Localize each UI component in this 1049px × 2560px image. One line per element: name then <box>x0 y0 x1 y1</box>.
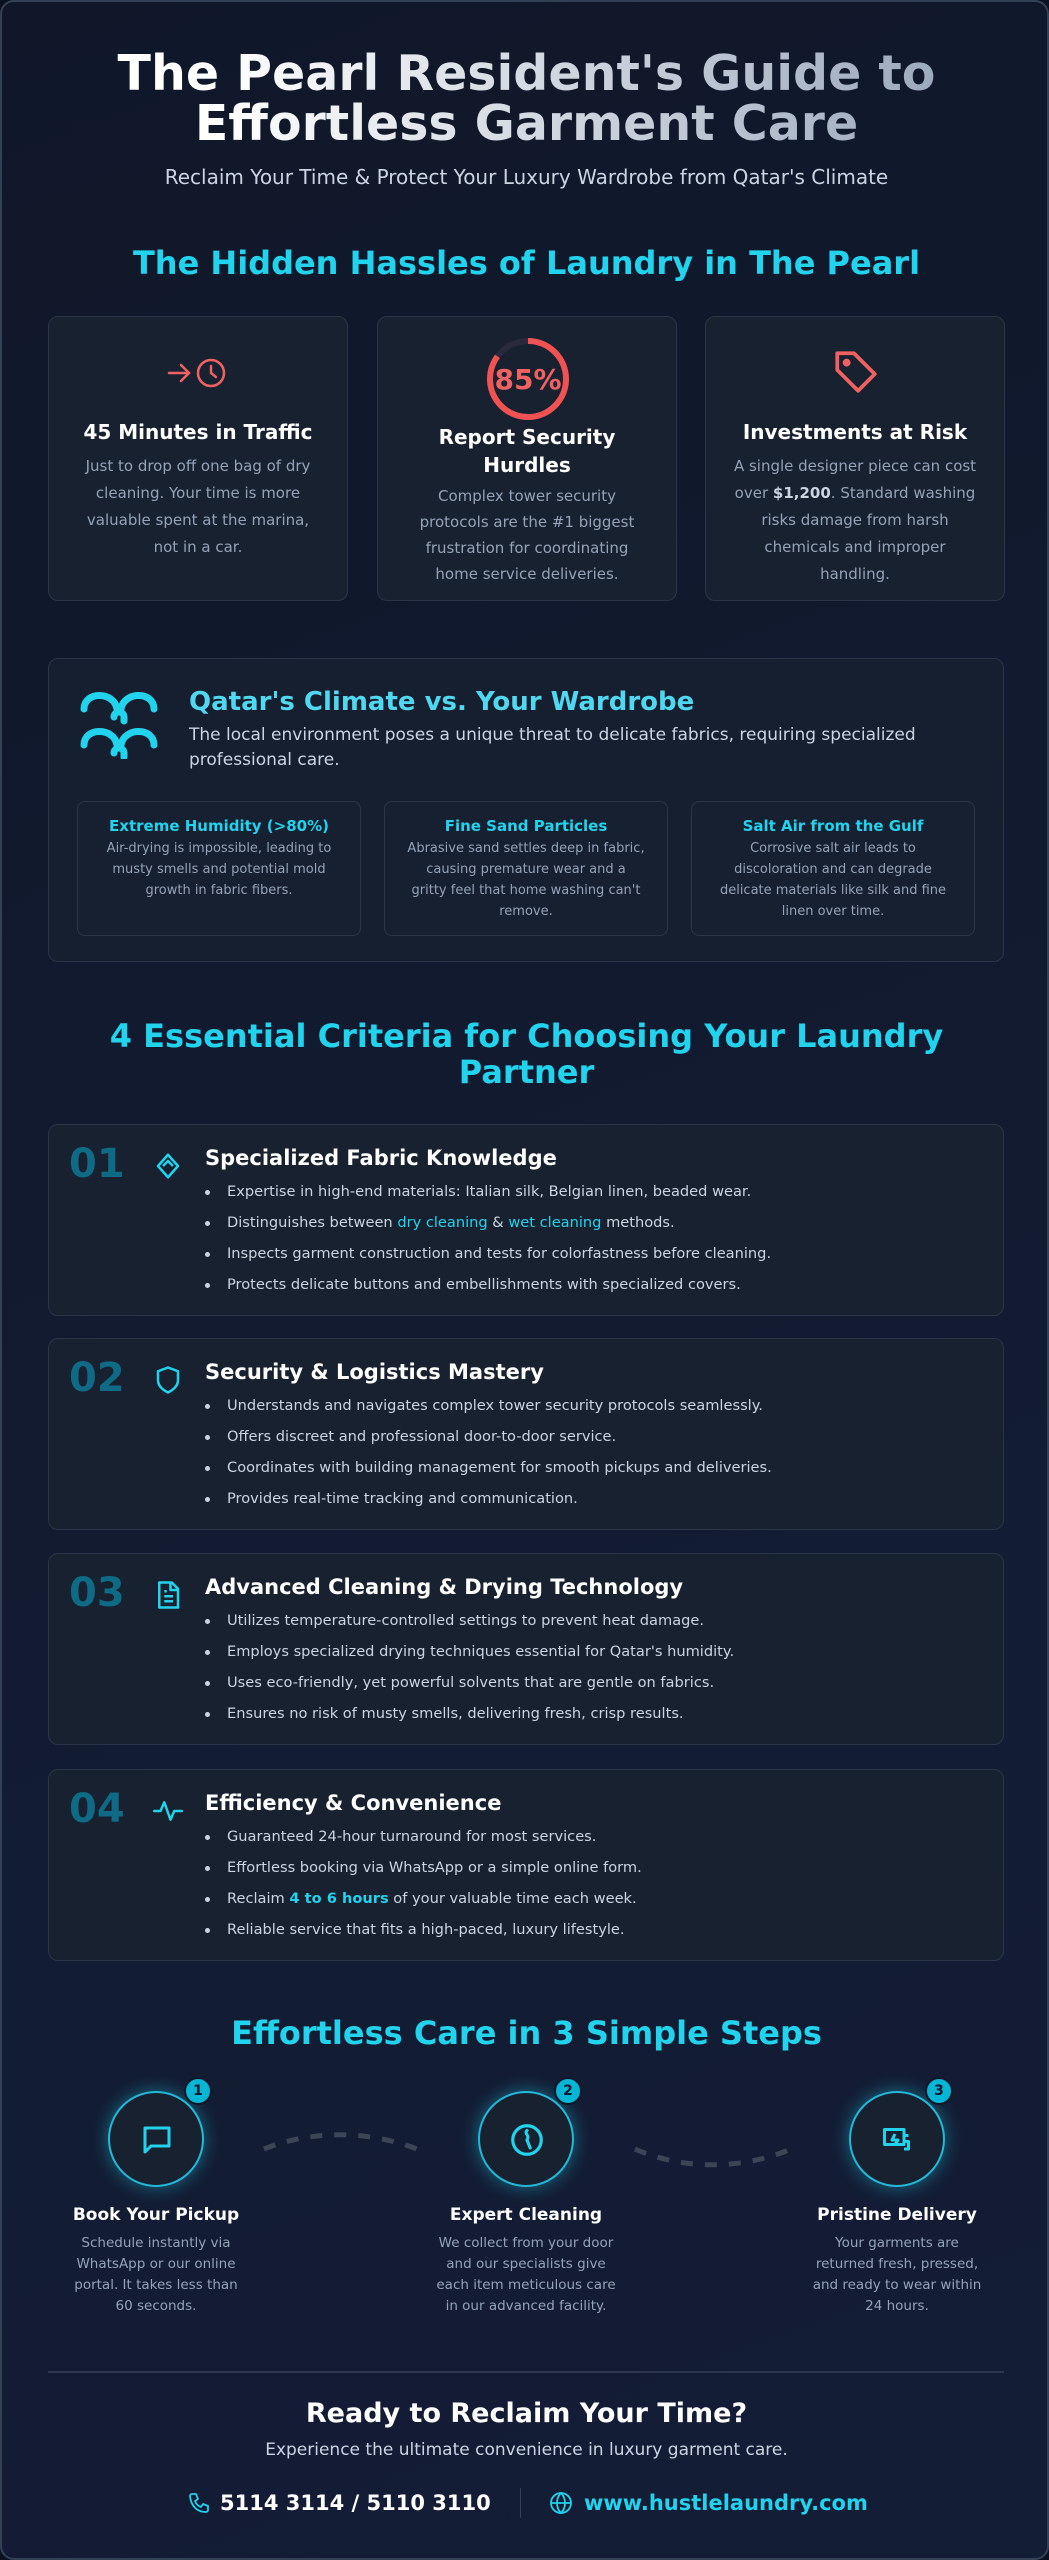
sub-card: sand: Fine Sand Particles <box>445 817 607 835</box>
cta text: Experience the ultimate convenience in luxury garment care. <box>265 2440 788 2460</box>
criteria 03: 03 <box>69 1570 125 1616</box>
criteria 03: Employs specialized drying techniques essential for Qatar's humidity. <box>227 1643 734 1660</box>
icon: shield <box>156 1366 180 1394</box>
card text: frustration for coordinating <box>426 539 628 557</box>
text: Schedule instantly via <box>81 2235 231 2251</box>
card title <box>439 425 615 477</box>
sub-card: humidity: Extreme Humidity (>80%) <box>109 817 329 835</box>
card title: 45 Minutes in Traffic <box>83 420 313 444</box>
criteria 04 <box>48 1769 1004 1961</box>
sub-card: salt: Corrosive salt air leads to discoloration and can degrade delicate materials like silk and fine linen over time. <box>720 841 946 919</box>
criteria 02: Understands and navigates complex tower security protocols seamlessly. <box>227 1397 763 1414</box>
icon: climate waves <box>80 692 158 759</box>
criteria 02: Provides real-time tracking and communication. <box>227 1490 578 1507</box>
title <box>2 49 1049 149</box>
card text: handling. <box>820 565 890 583</box>
icon: globe <box>550 2492 572 2514</box>
card text: valuable spent at the marina, <box>87 511 309 529</box>
card text <box>84 457 310 556</box>
text: and our specialists give <box>446 2256 606 2272</box>
climate text: The local environment poses a unique threat to delicate fabrics, requiring specialized professional care. <box>189 725 916 770</box>
criteria 02: Security & Logistics Mastery <box>205 1360 544 1384</box>
criteria 04: Reliable service that fits a high-paced, luxury lifestyle. <box>227 1921 625 1938</box>
text: 24 hours. <box>865 2298 929 2314</box>
icon: diamond <box>156 1153 180 1179</box>
step 1: 1 <box>193 2083 203 2099</box>
icon: pulse <box>153 1801 183 1821</box>
card text <box>734 457 976 583</box>
criteria 01: Protects delicate buttons and embellishments with specialized covers. <box>227 1276 741 1293</box>
panel: investments <box>705 316 1005 601</box>
criteria 04: Efficiency & Convenience <box>205 1791 501 1815</box>
contact row: www.hustlelaundry.com <box>584 2491 868 2515</box>
icon: cleaning <box>511 2124 543 2156</box>
card text: chemicals and improper <box>764 538 946 556</box>
criteria 03: Advanced Cleaning & Drying Technology <box>205 1575 683 1599</box>
card text: cleaning. Your time is more <box>96 484 300 502</box>
step 2: 2 <box>563 2083 573 2099</box>
text: portal. It takes less than <box>74 2277 238 2293</box>
climate heading: Qatar's Climate vs. Your Wardrobe <box>189 687 694 717</box>
criteria 04: Reclaim 4 to 6 hours of your valuable time each week. <box>227 1890 637 1907</box>
sub-card: humidity: Air-drying is impossible, leading to musty smells and potential mold growth in fabric fibers. <box>107 841 331 898</box>
criteria 01: Distinguishes between dry cleaning & wet cleaning methods. <box>227 1214 675 1231</box>
icon: 85% ring <box>487 338 569 420</box>
text: 60 seconds. <box>116 2298 196 2314</box>
criteria 03 <box>48 1553 1004 1745</box>
criteria 02 <box>48 1338 1004 1530</box>
criteria 02: Coordinates with building management for smooth pickups and deliveries. <box>227 1459 772 1476</box>
card text: home service deliveries. <box>435 565 619 583</box>
step 2 text: Expert Cleaning <box>450 2205 602 2225</box>
step 3: 3 <box>934 2083 944 2099</box>
card text: over $1,200. Standard washing <box>735 484 975 502</box>
criteria 04: 04 <box>69 1786 125 1832</box>
icon: arrow clock <box>168 358 226 388</box>
criteria 04: Effortless booking via WhatsApp or a simple online form. <box>227 1859 642 1876</box>
card text: not in a car. <box>154 538 242 556</box>
criteria 02: 02 <box>69 1355 125 1401</box>
criteria 01: Specialized Fabric Knowledge <box>205 1146 557 1170</box>
text: We collect from your door <box>439 2235 613 2251</box>
contact row <box>189 2488 868 2518</box>
text: in our advanced facility. <box>446 2298 606 2314</box>
heading: hidden hassles: The Hidden Hassles of Laundry in The Pearl <box>133 244 920 282</box>
sub-card: sand <box>384 801 668 936</box>
card text: Complex tower security <box>438 487 616 505</box>
card text: risks damage from harsh <box>761 511 949 529</box>
step 2 <box>478 2091 574 2187</box>
cta heading: Ready to Reclaim Your Time? <box>306 2398 747 2429</box>
arrows: dashed connectors <box>263 2132 788 2168</box>
text: and ready to wear within <box>813 2277 981 2293</box>
criteria 04: Guaranteed 24-hour turnaround for most services. <box>227 1828 596 1845</box>
icon: delivery <box>883 2128 910 2150</box>
criteria 03: Utilizes temperature-controlled settings to prevent heat damage. <box>227 1612 704 1629</box>
criteria 03: Uses eco-friendly, yet powerful solvents that are gentle on fabrics. <box>227 1674 714 1691</box>
panel: security <box>377 316 677 601</box>
step 1 text: Book Your Pickup <box>73 2205 239 2225</box>
panel: climate <box>48 658 1004 962</box>
step 3 <box>849 2091 945 2187</box>
heading: criteria <box>110 1017 943 1091</box>
sub-card: humidity <box>77 801 361 936</box>
card title: Hurdles <box>483 453 571 477</box>
panel: traffic <box>48 316 348 601</box>
card title: Report Security <box>439 425 615 449</box>
card text: protocols are the #1 biggest <box>420 513 634 531</box>
title: Effortless Garment Care <box>195 95 858 152</box>
card title: Investments at Risk <box>743 420 967 444</box>
sub-card: salt: Salt Air from the Gulf <box>743 817 923 835</box>
criteria 03: Ensures no risk of musty smells, delivering fresh, crisp results. <box>227 1705 684 1722</box>
icon: 85% ring: 85% <box>494 363 562 396</box>
heading: criteria: Partner <box>459 1053 594 1091</box>
criteria 01: 01 <box>69 1141 125 1187</box>
heading: criteria: 4 Essential Criteria for Choosing Your Laundry <box>110 1017 943 1055</box>
criteria 01 <box>48 1124 1004 1316</box>
criteria 01: Expertise in high-end materials: Italian silk, Belgian linen, beaded wear. <box>227 1183 751 1200</box>
icon: phone <box>189 2493 209 2513</box>
card text: Just to drop off one bag of dry <box>86 457 310 475</box>
sub-card: sand: Abrasive sand settles deep in fabric, causing premature wear and a gritty feel that home washing can't remove. <box>407 841 645 919</box>
criteria 02: Offers discreet and professional door-to-door service. <box>227 1428 616 1445</box>
heading: steps: Effortless Care in 3 Simple Steps <box>231 2014 822 2052</box>
icon: tag <box>835 351 877 393</box>
criteria 01: Inspects garment construction and tests for colorfastness before cleaning. <box>227 1245 771 1262</box>
step 3 text: Pristine Delivery <box>817 2205 977 2225</box>
icon: chat <box>144 2126 170 2154</box>
text: each item meticulous care <box>436 2277 616 2293</box>
sub-card: salt <box>691 801 975 936</box>
step 1 <box>108 2091 204 2187</box>
icon: document <box>158 1581 180 1609</box>
text: returned fresh, pressed, <box>816 2256 978 2272</box>
contact row: 5114 3114 / 5110 3110 <box>220 2491 491 2515</box>
card text <box>420 487 634 583</box>
text: Your garments are <box>835 2235 959 2251</box>
title: The Pearl Resident's Guide to <box>118 45 935 102</box>
card text: A single designer piece can cost <box>734 457 976 475</box>
text: WhatsApp or our online <box>76 2256 236 2272</box>
subtitle: Reclaim Your Time & Protect Your Luxury Wardrobe from Qatar's Climate <box>165 165 888 189</box>
